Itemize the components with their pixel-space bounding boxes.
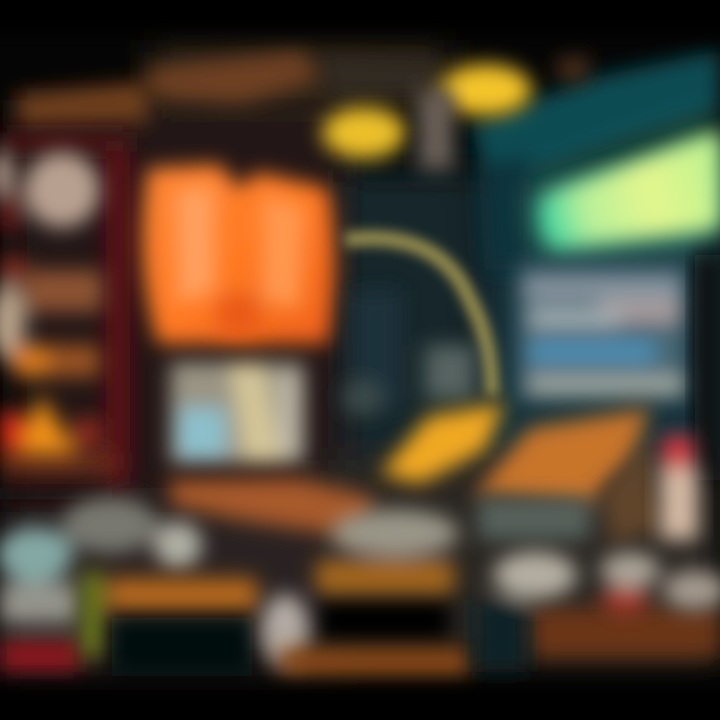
foreground orange tray: [82, 572, 258, 657]
neon green sign: [541, 130, 720, 248]
foreground right plates: [475, 551, 720, 672]
large orange panel: [142, 164, 335, 344]
stall base: [478, 440, 662, 545]
wooden counter: [168, 478, 375, 538]
right dark pillar: [695, 255, 720, 480]
bottom wooden ledge: [280, 608, 720, 676]
red and white figure: [660, 436, 698, 540]
framed picture: [170, 362, 304, 464]
ceiling lamps: [322, 64, 532, 159]
orange panel highlights: [175, 185, 305, 335]
right wall menu stripes: [518, 265, 686, 400]
teal ceiling: [470, 50, 720, 270]
shelf items: [0, 149, 103, 455]
center bowls: [261, 509, 459, 666]
top wooden beams: [15, 50, 590, 126]
orange stall roof: [474, 408, 650, 504]
golden yellow awning: [380, 402, 505, 484]
foreground left white items: [0, 497, 202, 672]
foreground black pots: [112, 597, 450, 676]
dark doorway detail: [342, 290, 475, 416]
hanging column: [418, 90, 454, 170]
neon green sign glow: [535, 125, 720, 255]
curved golden arch: [345, 238, 492, 395]
left red shelf frame: [0, 132, 130, 500]
